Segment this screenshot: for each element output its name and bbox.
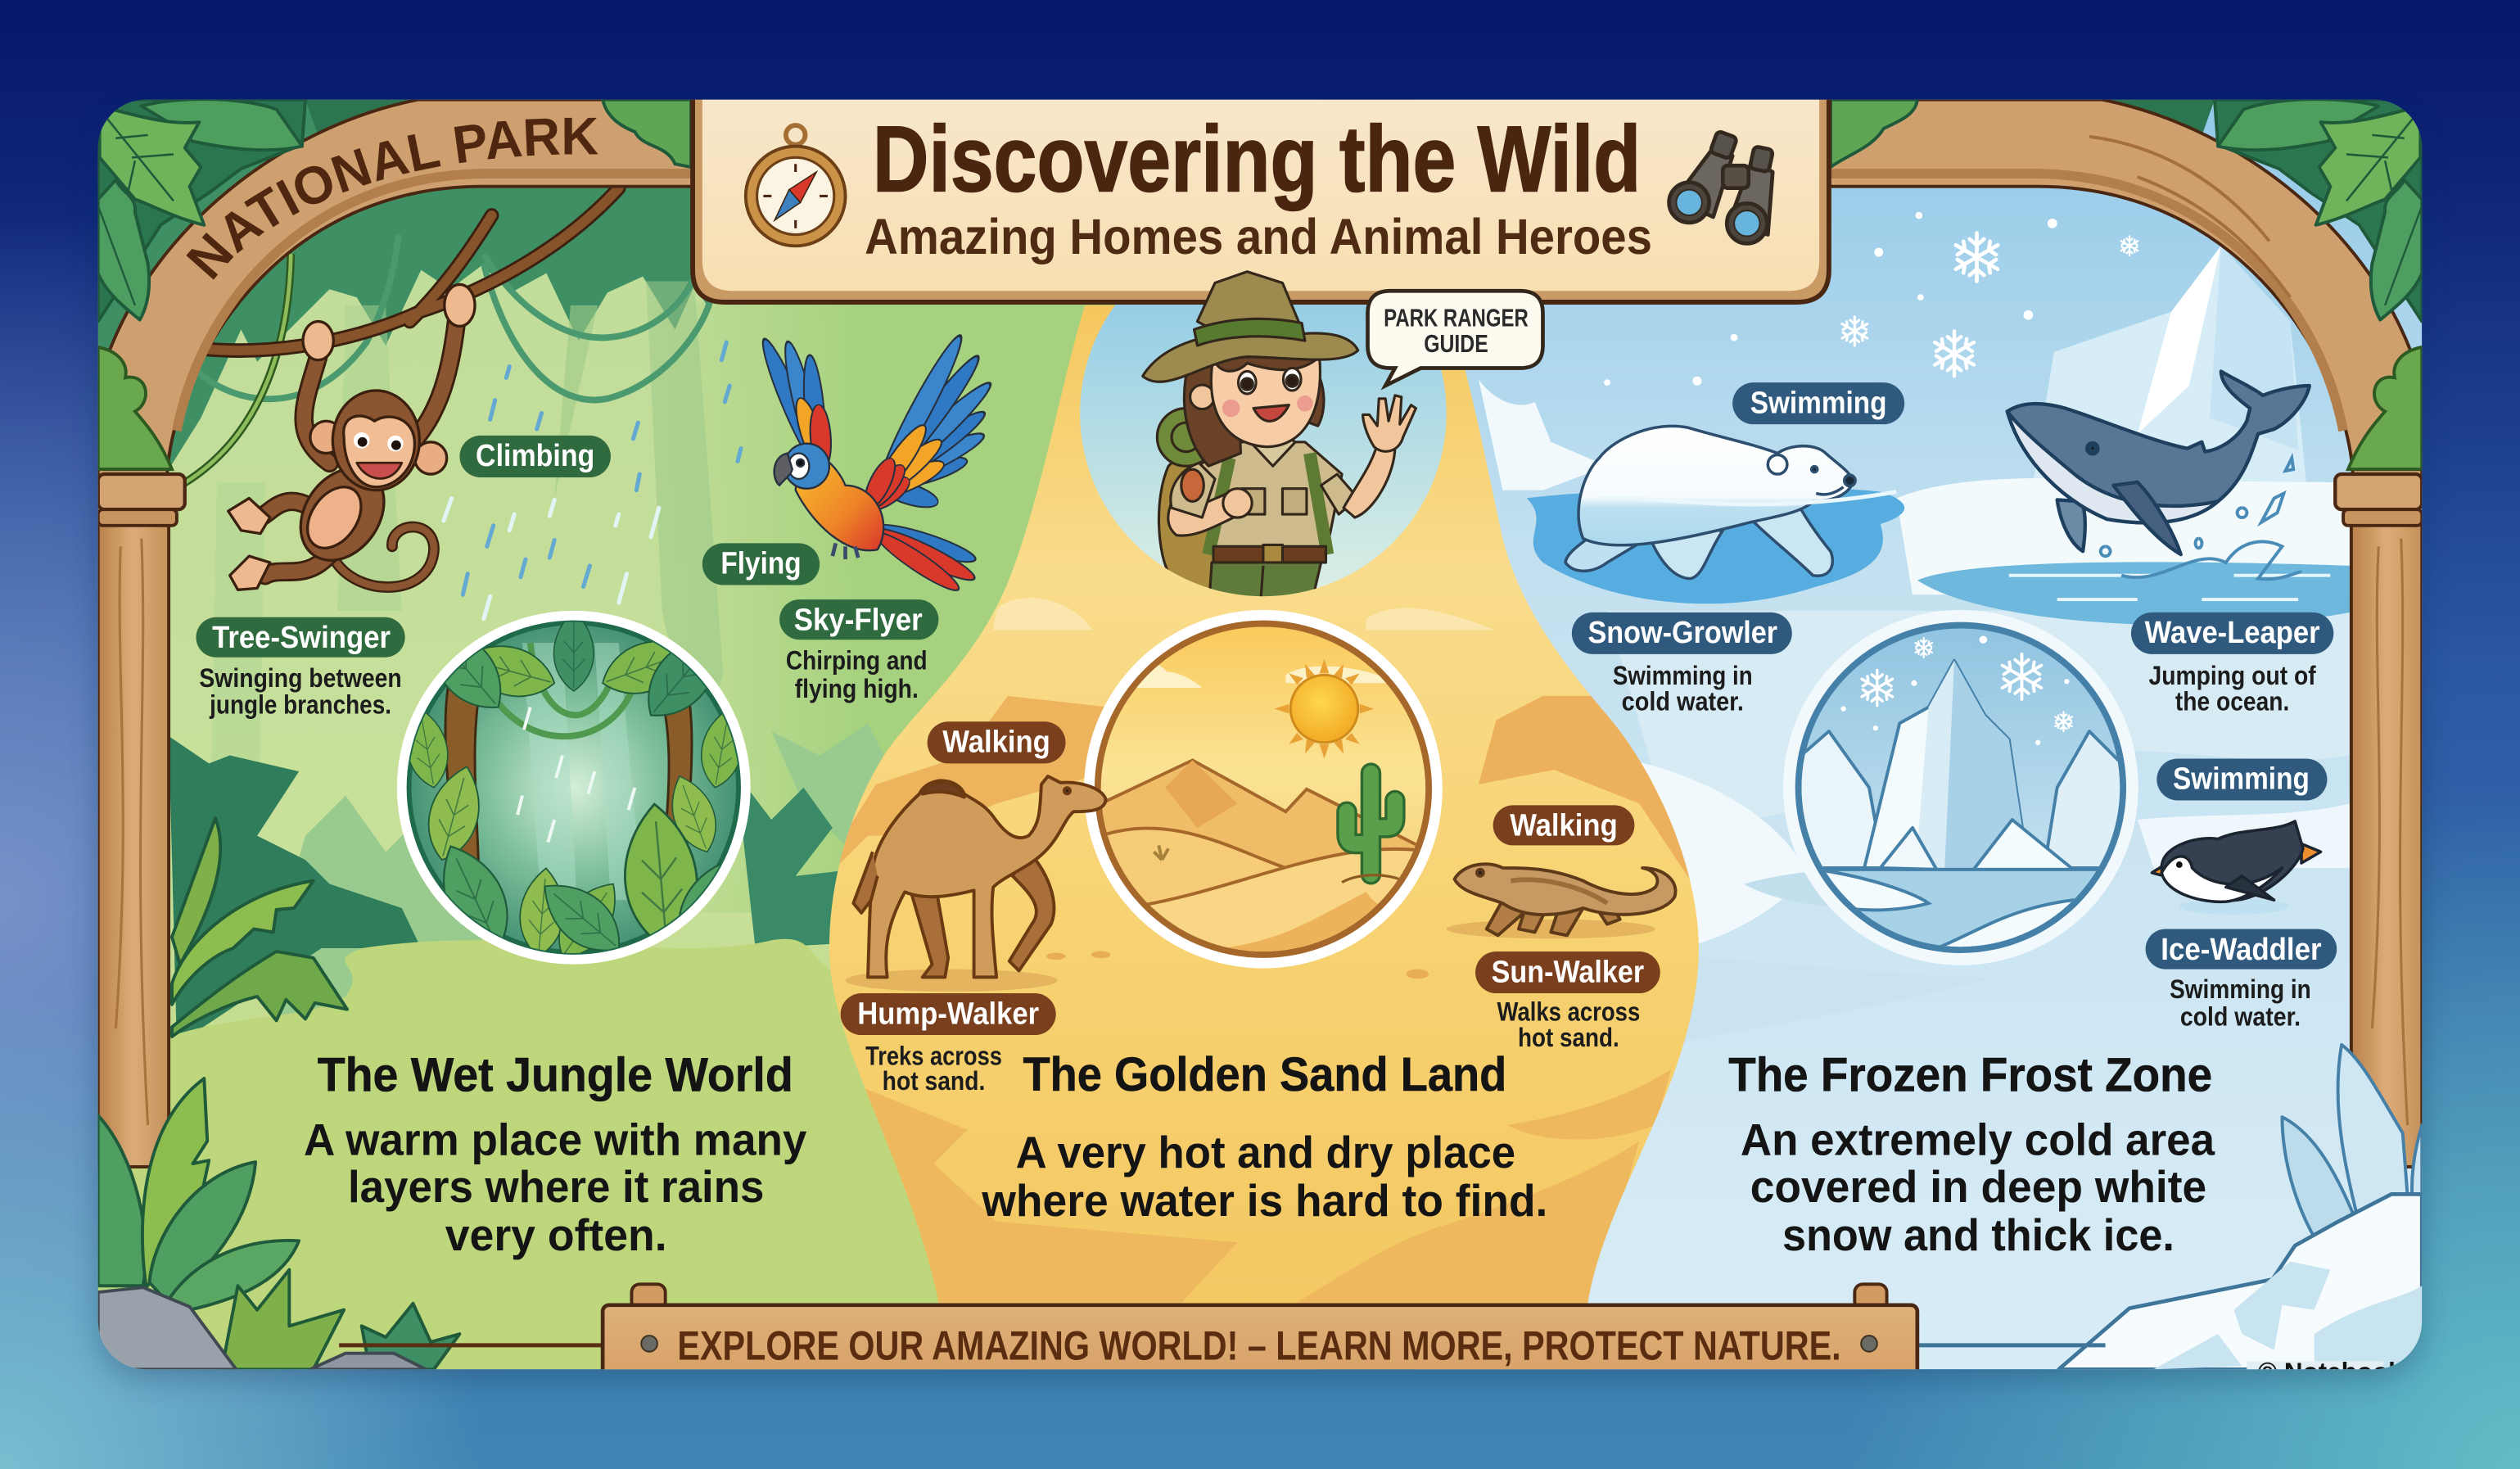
headings and descriptions: desert: A very hot and dry place bbox=[1016, 1127, 1515, 1177]
label: Snow-Growler: Snow-Growler bbox=[1587, 615, 1777, 650]
label: Flying bbox=[702, 543, 820, 585]
icon: compass bbox=[746, 125, 846, 246]
text: Hump-Walker description: Treks across bbox=[865, 1041, 1002, 1070]
backpack bbox=[1158, 437, 1245, 598]
headings and descriptions: jungle: A warm place with many bbox=[304, 1114, 807, 1164]
footer sign: EXPLORE OUR AMAZING WORLD! – LEARN MORE, PROTECT NATURE. bbox=[677, 1323, 1841, 1369]
text: Hump-Walker description bbox=[865, 1041, 1002, 1096]
headings and descriptions: frozen: covered in deep white bbox=[1750, 1161, 2206, 1212]
hair and face bbox=[1184, 362, 1240, 466]
panel: jungle bbox=[98, 100, 1320, 1369]
right post bbox=[2335, 474, 2422, 1167]
panel: frozen bbox=[1414, 100, 2422, 1369]
label: Walking lizard: Walking bbox=[1510, 808, 1618, 843]
label: Flying: Flying bbox=[720, 546, 802, 581]
big iceberg bbox=[1479, 246, 2306, 490]
snow bank bbox=[2059, 1194, 2422, 1369]
medallion: desert bbox=[1084, 610, 1443, 969]
sand dunes bbox=[839, 598, 1690, 1304]
grass bbox=[98, 939, 1028, 1369]
animal: penguin bbox=[2152, 821, 2321, 915]
left arm bbox=[1168, 482, 1240, 536]
label: Swimming penguin: Swimming bbox=[2173, 762, 2310, 797]
headings and descriptions: frozen: snow and thick ice. bbox=[1782, 1209, 2175, 1260]
animal: monkey bbox=[228, 284, 475, 590]
headings and descriptions: jungle: layers where it rains bbox=[348, 1161, 764, 1212]
arch sign text bbox=[212, 154, 582, 282]
text: Snow-Growler description: cold water. bbox=[1622, 687, 1744, 716]
text: Ice-Waddler description bbox=[2170, 974, 2311, 1031]
text: Sun-Walker description: Walks across bbox=[1497, 997, 1640, 1026]
icon: binoculars bbox=[1669, 131, 1773, 243]
subtitle: Amazing Homes and Animal Heroes bbox=[865, 209, 1652, 264]
text: Wave-Leaper description: Jumping out of bbox=[2149, 661, 2316, 690]
wooden arch frame: NATIONAL PARK bbox=[187, 118, 598, 280]
title: Discovering the Wild bbox=[873, 108, 1641, 212]
label: Ice-Waddler: Ice-Waddler bbox=[2161, 932, 2322, 967]
text: Sun-Walker description bbox=[1497, 997, 1640, 1052]
animal: whale bbox=[2007, 371, 2310, 554]
label: Swimming bear: Swimming bbox=[1750, 385, 1887, 420]
vine bbox=[183, 254, 291, 484]
torso bbox=[1197, 442, 1342, 554]
title header panel bbox=[693, 93, 1829, 302]
pants bbox=[1208, 563, 1321, 611]
text: Ice-Waddler description: Swimming in bbox=[2170, 974, 2311, 1004]
rain drops bbox=[444, 342, 741, 619]
panel: desert bbox=[804, 305, 1704, 1369]
body and head bbox=[796, 452, 883, 550]
wooden arch frame bbox=[98, 100, 2422, 1168]
text: Sky-Flyer description: Chirping and bbox=[786, 646, 928, 676]
speech bubble: GUIDE bbox=[1424, 330, 1488, 358]
label: Sun-Walker: Sun-Walker bbox=[1492, 954, 1644, 989]
headings and descriptions: desert: The Golden Sand Land bbox=[1023, 1048, 1506, 1101]
label: Climbing: Climbing bbox=[476, 438, 594, 473]
headings and descriptions: desert bbox=[981, 1048, 1547, 1226]
text: Snow-Growler description bbox=[1613, 661, 1753, 716]
corner leaves right bbox=[2215, 99, 2422, 322]
footer sign bbox=[339, 1284, 2106, 1385]
text: Wave-Leaper description: the ocean. bbox=[2175, 687, 2289, 716]
headings and descriptions: jungle: very often. bbox=[445, 1209, 667, 1260]
text: Wave-Leaper description bbox=[2149, 661, 2316, 716]
text: Tree-Swinger description bbox=[199, 663, 402, 719]
speech bubble: PARK RANGER bbox=[1384, 304, 1529, 332]
label: Tree-Swinger: Tree-Swinger bbox=[212, 620, 391, 655]
headings and descriptions: jungle bbox=[304, 1049, 807, 1260]
right arm bbox=[1321, 474, 1358, 514]
label: Wave-Leaper: Wave-Leaper bbox=[2145, 615, 2320, 650]
belt bbox=[1213, 546, 1325, 563]
text: Hump-Walker description: hot sand. bbox=[883, 1066, 985, 1096]
rocks bbox=[98, 1287, 237, 1369]
jungle bushes bbox=[169, 723, 908, 1045]
animal: polar bear bbox=[1565, 426, 1896, 579]
medallion: jungle bbox=[368, 611, 770, 969]
header side foliage right bbox=[1831, 100, 1917, 167]
text: Snow-Growler description: Swimming in bbox=[1613, 661, 1753, 690]
card shadow bbox=[98, 109, 2422, 1379]
cactus bbox=[1347, 773, 1395, 875]
water splash bbox=[2101, 458, 2301, 579]
animal: camel bbox=[846, 776, 1106, 992]
header side foliage left bbox=[603, 100, 691, 167]
branch bbox=[190, 188, 619, 350]
text: Tree-Swinger description: Swinging between bbox=[199, 663, 402, 693]
headings and descriptions: frozen: The Frozen Frost Zone bbox=[1728, 1049, 2212, 1102]
right wing bbox=[878, 476, 941, 513]
text: Tree-Swinger description: jungle branches. bbox=[209, 689, 391, 719]
label: Hump-Walker: Hump-Walker bbox=[857, 996, 1039, 1031]
small bush right bbox=[2348, 347, 2422, 469]
hat bbox=[1143, 272, 1358, 382]
headings and descriptions: frozen: An extremely cold area bbox=[1741, 1114, 2215, 1164]
text: Sky-Flyer description bbox=[786, 646, 928, 703]
text: Sky-Flyer description: flying high. bbox=[795, 674, 919, 703]
medallion: ice bbox=[1783, 610, 2138, 965]
headings and descriptions: frozen bbox=[1728, 1049, 2215, 1260]
label: Sky-Flyer: Sky-Flyer bbox=[794, 602, 923, 637]
ice crystals bbox=[2282, 1045, 2422, 1286]
animal: parrot bbox=[756, 331, 997, 597]
corner leaves left bbox=[98, 99, 305, 322]
text: Ice-Waddler description: cold water. bbox=[2180, 1001, 2301, 1031]
headings and descriptions: jungle: The Wet Jungle World bbox=[318, 1049, 793, 1102]
park ranger character bbox=[1143, 272, 1416, 611]
snow fields bbox=[1896, 478, 2350, 594]
snowflakes and dots bbox=[1604, 212, 2138, 386]
tail feathers bbox=[873, 518, 978, 568]
label: Walking camel: Walking bbox=[942, 725, 1050, 760]
animal: lizard bbox=[1447, 864, 1676, 938]
sky circle behind ranger bbox=[1080, 305, 1447, 596]
foliage: left mid plants bbox=[172, 818, 347, 1037]
speech bubble bbox=[1368, 291, 1542, 386]
left post bbox=[98, 474, 185, 1167]
watermark: © NotebookLM bbox=[2258, 1358, 2440, 1386]
small bush left bbox=[98, 347, 172, 469]
text: Sun-Walker description: hot sand. bbox=[1518, 1023, 1619, 1052]
foliage: bottom left plants bbox=[98, 1078, 459, 1369]
left wing bbox=[756, 336, 829, 473]
headings and descriptions: desert: where water is hard to find. bbox=[981, 1175, 1547, 1226]
